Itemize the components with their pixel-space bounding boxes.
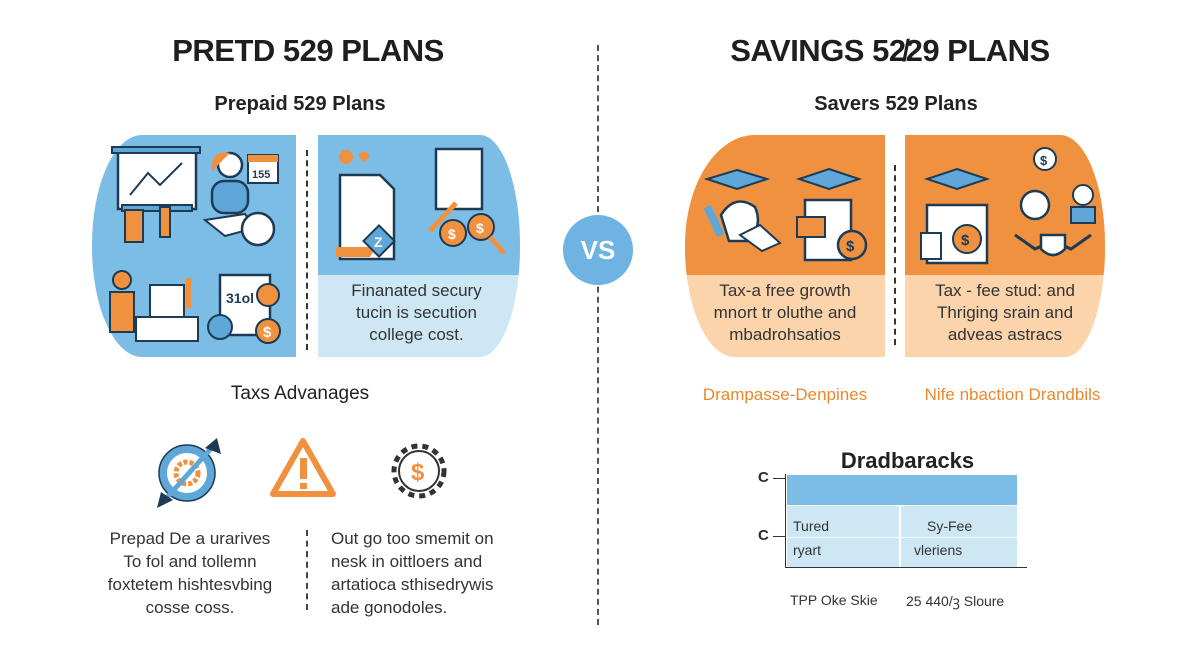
text: tax-free study: Thriging srain and [937, 303, 1073, 322]
chart: drawbacks table: C [758, 469, 769, 486]
title: left: PRETD 529 PLANS [172, 33, 444, 68]
icon: person with clock [205, 152, 278, 245]
divider between savings panels [894, 165, 896, 345]
panel: prepaid icons [92, 135, 296, 357]
divider small [306, 530, 308, 610]
icon: documents with coin [797, 169, 866, 260]
text: tax-free growth [714, 281, 856, 344]
icon: person with clock: 155 [252, 169, 270, 181]
text: table footnotes: TPP Oke Skie [790, 592, 878, 608]
icon: document with dollar: $ [961, 232, 970, 249]
title: right: SAVINGS 52̸29 PLANS [730, 33, 1050, 68]
text: prepaid drawbacks left: foxtetem hishtesvbing [108, 575, 272, 594]
icon: checklist document [336, 150, 395, 259]
VS badge: VS [581, 235, 615, 265]
icon: warning triangle [270, 438, 336, 497]
text: prepaid drawbacks right: nesk in oittloers and [331, 552, 482, 571]
icon: person at desk [110, 271, 198, 341]
text: financial security: college cost. [369, 325, 464, 344]
text: prepaid drawbacks right: ade gonodoles. [331, 598, 447, 617]
text: prepaid drawbacks right [331, 529, 494, 617]
text: financial security: tucin is secution [356, 303, 477, 322]
heading: tax advantages: Taxs Advanages [231, 383, 369, 404]
chart: drawbacks table: C [758, 527, 769, 544]
icon: documents with coin: $ [846, 238, 855, 255]
icon: clock shield hands [1015, 148, 1095, 255]
chart: drawbacks table: vleriens [914, 542, 962, 558]
text: tax-free growth: Tax-a free growth [719, 281, 851, 300]
panel: savings growth [685, 135, 885, 357]
divider between prepaid panels [306, 150, 308, 350]
chart: drawbacks table: Sy-Fee [927, 518, 972, 534]
text: tax-free growth: mnort tr oluthe and [714, 303, 856, 322]
text: prepaid drawbacks left: To fol and tollemn [123, 552, 257, 571]
label: drawbacks left: Drampasse-Denpines [703, 385, 867, 404]
text: prepaid drawbacks left: cosse coss. [146, 598, 234, 617]
text: tax-free study: adveas astracs [948, 325, 1062, 344]
VS badge [563, 215, 633, 285]
text: table footnotes [790, 592, 1004, 610]
text: financial security [351, 281, 482, 344]
icon: gear arrows [157, 438, 221, 508]
text: prepaid drawbacks left [108, 529, 272, 617]
icon: document with magnifier: $ [448, 226, 456, 242]
chart: drawbacks table: ryart [793, 542, 821, 558]
text: financial security: Finanated secury [351, 281, 482, 300]
panel: prepaid financial security [318, 135, 520, 357]
icon: calendar with coins: 31ol [226, 290, 254, 306]
chart: drawbacks table: Tured [793, 518, 829, 534]
icon: chart board [112, 147, 200, 242]
subtitle: right: Savers 529 Plans [814, 93, 978, 115]
text: table footnotes: 25 440/ꝫ Sloure [906, 593, 1004, 609]
text: prepaid drawbacks right: artatioca sthisedrywis [331, 575, 494, 594]
icon: dollar gear [392, 444, 446, 498]
text: prepaid drawbacks right: Out go too smemit on [331, 529, 494, 548]
text: prepaid drawbacks left: Prepad De a urarives [110, 529, 270, 548]
center divider [597, 45, 599, 625]
panel: savings tax-free study [905, 135, 1105, 357]
icon: checklist document: Z [374, 234, 383, 250]
text: tax-free study: Tax - fee stud: and [935, 281, 1075, 300]
subtitle: left: Prepaid 529 Plans [214, 93, 386, 115]
icon: document with dollar [921, 169, 987, 263]
icon: document with magnifier [430, 149, 504, 253]
icon: graduate with phone [704, 170, 780, 251]
text: tax-free growth: mbadrohsatios [729, 325, 841, 344]
heading: drawbacks: Dradbaracks [841, 448, 974, 473]
icon: calendar with coins [208, 275, 280, 343]
text: tax-free study [935, 281, 1075, 344]
icon: calendar with coins: $ [263, 324, 272, 341]
icon: dollar gear: $ [411, 459, 425, 486]
icon: clock shield hands: $ [1040, 153, 1048, 168]
chart: drawbacks table [758, 469, 1027, 568]
icon: document with magnifier: $ [476, 220, 484, 236]
label: drawbacks right: Nife nbaction Drandbils [925, 385, 1100, 404]
